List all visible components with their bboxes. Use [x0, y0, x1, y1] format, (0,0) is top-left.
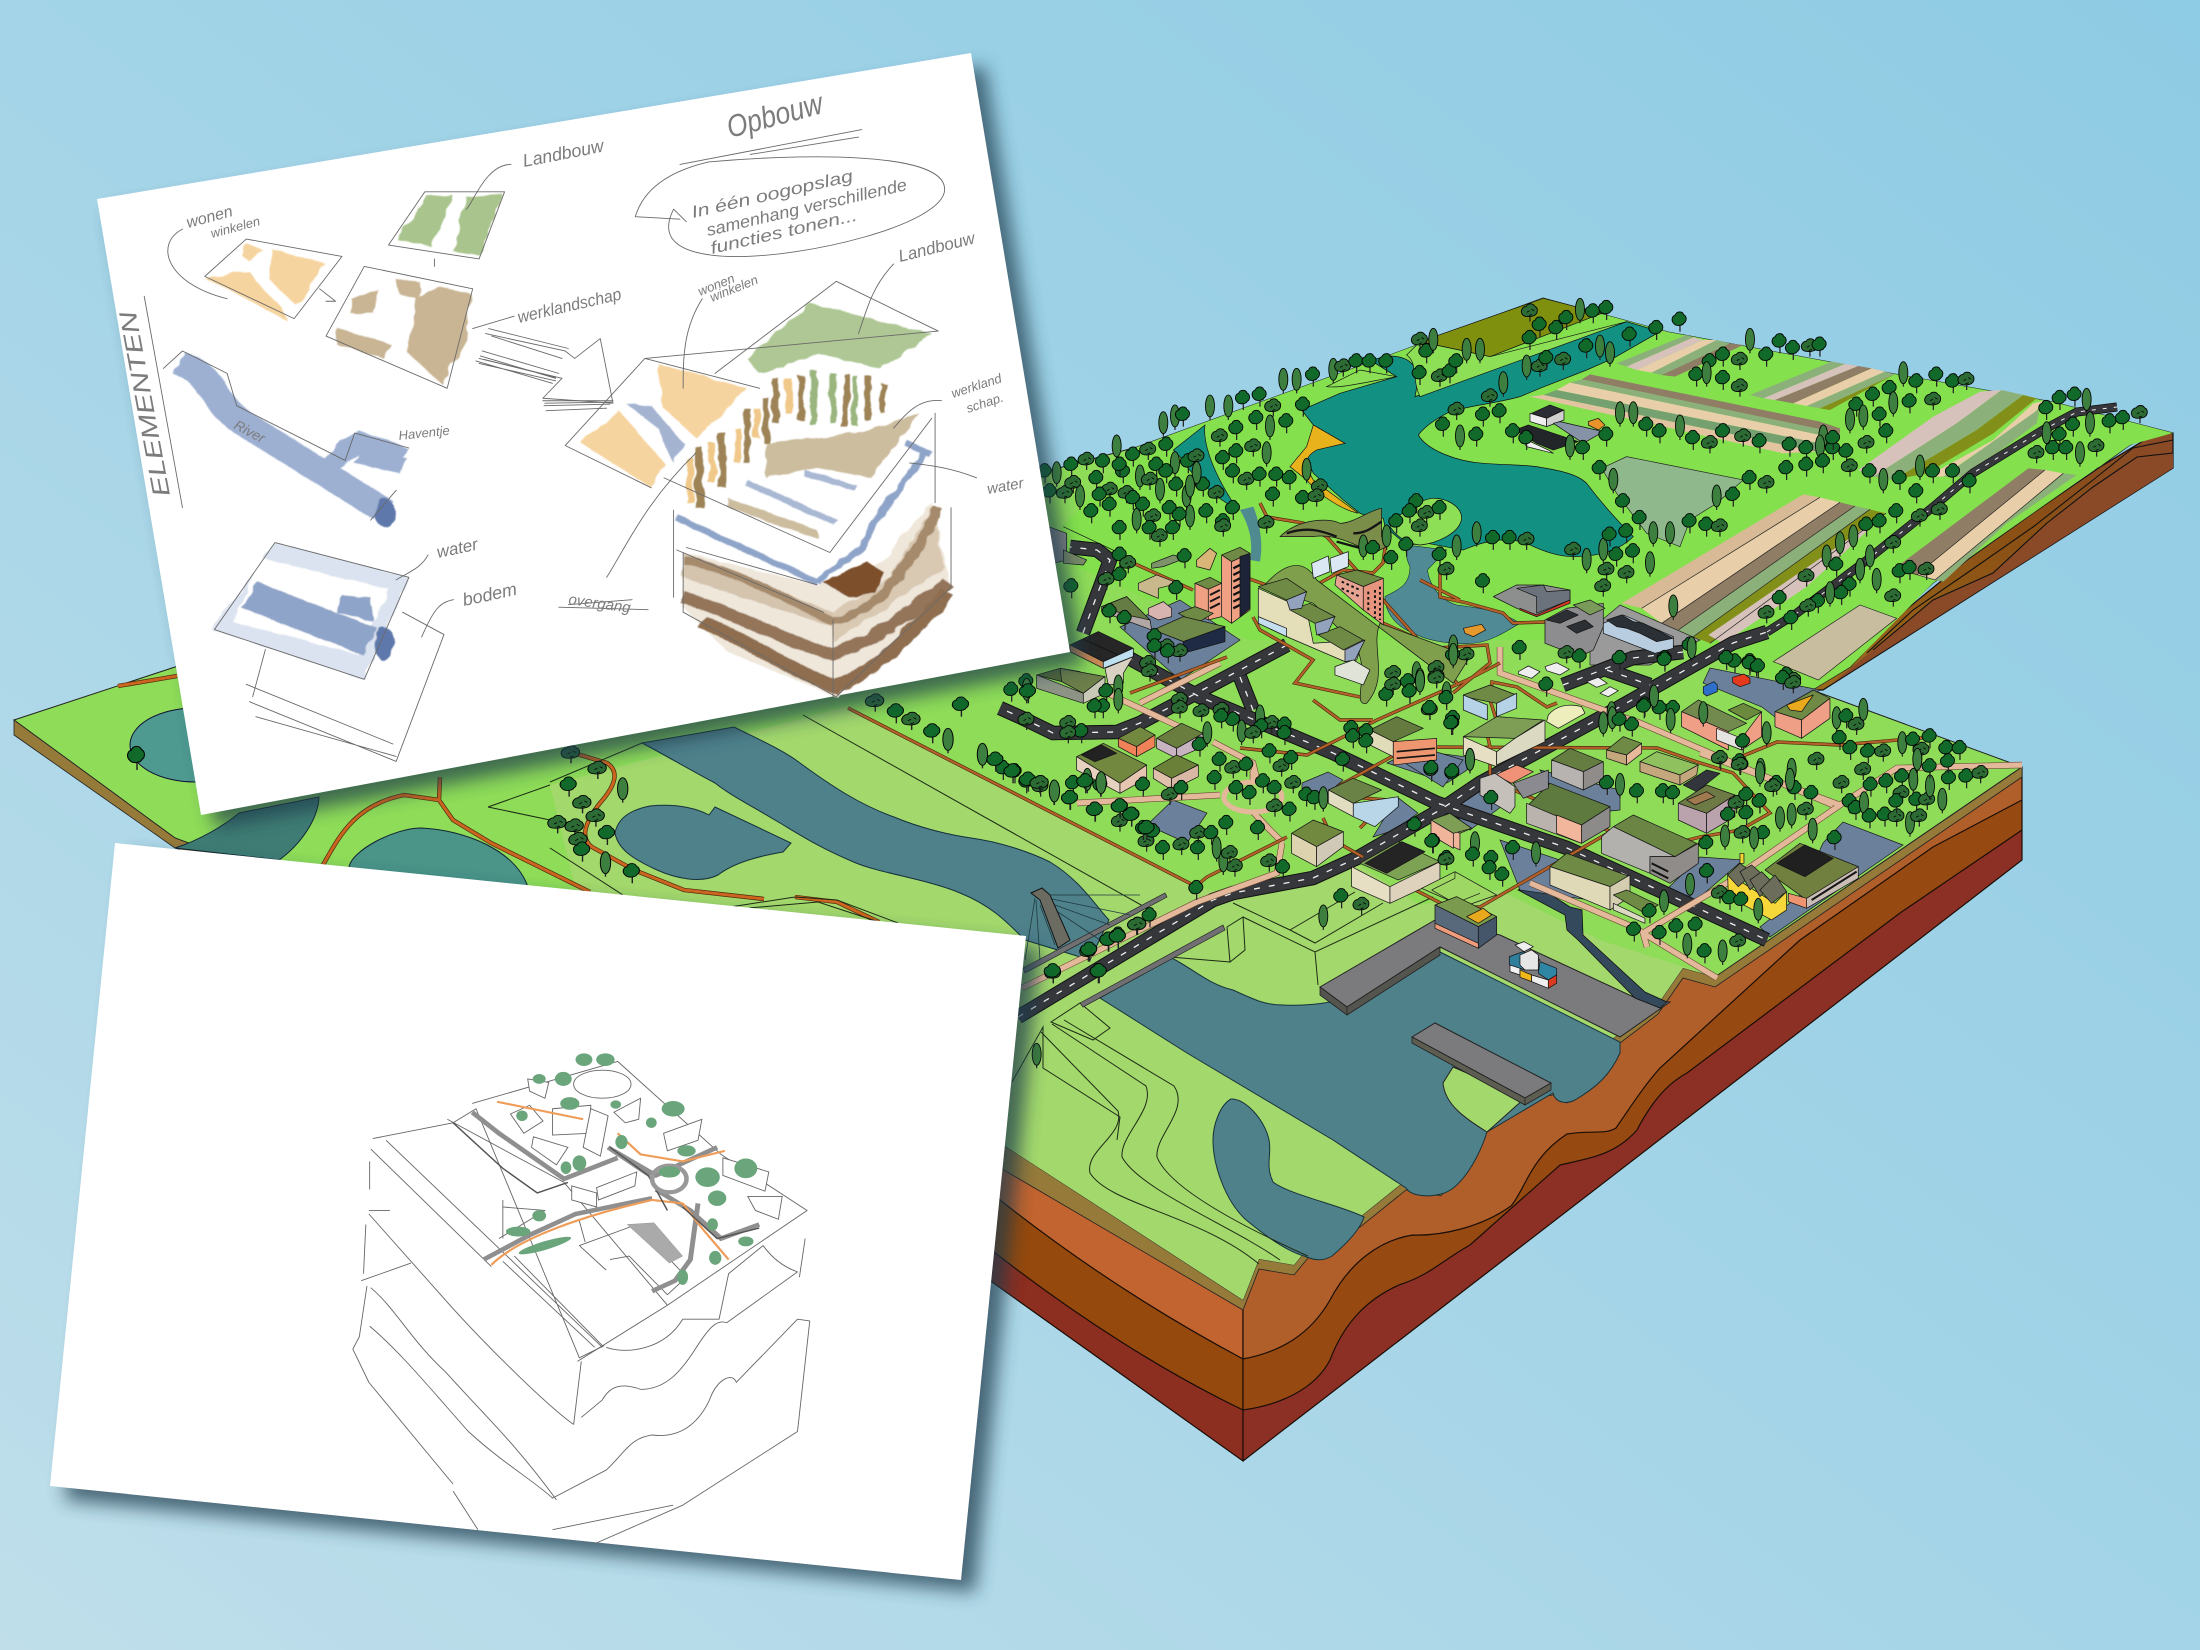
trees: west forest [1019, 354, 1474, 743]
tall pink tower [1222, 547, 1250, 562]
field: plain tan [1773, 605, 1897, 680]
hill side, upper board [1812, 433, 2173, 690]
lower sheet: white paper with pencil sketch [50, 843, 1026, 1580]
upper sheet: shadow [110, 66, 1084, 828]
cream hall [1463, 717, 1543, 738]
sketched roads [453, 1102, 759, 1291]
trees: south town [995, 639, 1496, 1068]
sketch label: ELEMENTEN: ELEMENTEN [115, 308, 176, 499]
cream stepped building [1258, 588, 1363, 662]
harbour square pit [1422, 872, 1497, 907]
sketch label: wonen winkelen small: wonen [185, 203, 235, 232]
field: centre stripes [1530, 374, 1840, 453]
tennis block [1495, 765, 1533, 783]
sketch label: water right: water [986, 475, 1026, 498]
gray factory hall [1493, 585, 1570, 615]
forest meadow boundary [1063, 527, 1193, 590]
wavy green structure [1280, 508, 1387, 553]
sketch label: Landbouw small: Landbouw [521, 135, 606, 171]
green strip above lake [1327, 322, 1627, 397]
gray green long block [1102, 597, 1152, 630]
lighter river foreland [550, 707, 1715, 1300]
green-roof office [1370, 717, 1423, 742]
solar roof building [1070, 632, 1133, 662]
pink offices [1682, 700, 1747, 732]
black barn [1515, 425, 1578, 450]
harbour island [1443, 1067, 1525, 1132]
pencil lines [144, 130, 977, 761]
farm truck [1588, 418, 1605, 430]
chimney [1740, 853, 1744, 863]
silos [1545, 603, 1603, 657]
field: right stripes [1858, 390, 2047, 480]
block outlines [353, 1061, 810, 1544]
cream block south [1292, 820, 1343, 847]
watercolour layer [179, 194, 951, 697]
quay and piers [1320, 920, 1670, 1105]
factory yard [1590, 605, 1700, 665]
white farm barn [1532, 405, 1563, 418]
buildings, north town [1037, 508, 1470, 704]
sketched trees [506, 1053, 757, 1285]
cable stay bridge pylon [1025, 888, 1140, 960]
sketch label: Landbouw large: Landbouw [896, 228, 978, 266]
tan block [1153, 755, 1198, 778]
stream [1240, 507, 1261, 562]
pink-cream row [1431, 813, 1472, 833]
sketch label: werklandschap right [949, 370, 1005, 416]
footpaths [1022, 647, 2022, 988]
lake island [1390, 498, 1462, 545]
small houses [1518, 666, 1540, 678]
wash: work landscape large [728, 413, 919, 540]
navy building [1153, 617, 1225, 642]
sketch label: overgang: overgang [567, 591, 632, 617]
offices near road [1077, 743, 1147, 783]
sketch label: River: River [232, 417, 269, 447]
olive field [1420, 298, 1602, 357]
upper farmland grass [1040, 298, 2173, 690]
trees: lake and farmland [1402, 298, 1839, 773]
field: top stripes [1750, 362, 1895, 410]
wash: soil water sheet [211, 543, 409, 679]
sketch label: water left: water [435, 534, 481, 562]
solar building south [1360, 842, 1440, 880]
dark arch [1683, 770, 1720, 792]
sketch label: Opbouw: Opbouw [723, 85, 829, 145]
wash: large housing layer [581, 363, 747, 488]
glass cubes [1312, 552, 1348, 578]
buildings, south east town [1431, 663, 1858, 988]
trees: central town [1402, 637, 1794, 965]
3D landscape model [14, 298, 2173, 1461]
brown block [1640, 752, 1698, 775]
walking trails [848, 503, 1933, 908]
wash: transition poles [696, 373, 886, 508]
harbour water [1100, 952, 1620, 1196]
sketch label: wonen winkelen small: winkelen [209, 213, 262, 241]
lower sheet: shadow [65, 855, 1040, 1592]
gray block with roof garden [1527, 783, 1610, 825]
pond by the river [615, 805, 791, 879]
wash: agriculture small [396, 194, 503, 255]
note bubble text: samenhang verschillende [705, 175, 909, 240]
canal [1518, 883, 1667, 1008]
sketch label: werklandschap: werklandschap [516, 285, 623, 327]
buildings, farm and factory [1463, 405, 1673, 657]
orange hut [1463, 624, 1486, 637]
white blue warehouse [1603, 615, 1673, 653]
solar warehouse [1765, 843, 1858, 900]
note bubble text: In één oogopslag [690, 166, 855, 222]
sketch label: wonen winkelen large: winkelen [708, 272, 760, 305]
trees: river foreland [548, 684, 1154, 983]
tan edge strips [14, 720, 2022, 1310]
green hill park [1263, 565, 1470, 704]
buildings, middle town [1077, 717, 1497, 907]
low pink block [1195, 577, 1222, 589]
sketch label: wonen winkelen small [185, 203, 262, 241]
glass house [1463, 685, 1517, 715]
soil layers: left face [985, 1148, 1243, 1461]
long gray building [1613, 815, 1697, 857]
sketch label: Haventje: Haventje [398, 423, 450, 443]
lilac block [1157, 723, 1203, 748]
container stack [1515, 942, 1533, 952]
soil layers: right face [1243, 767, 2022, 1461]
upper board: fields and lake [1622, 362, 2077, 680]
bridge gray strip [1023, 893, 1225, 1007]
foreland contour lines [1012, 892, 1433, 1264]
small glass annex [1335, 660, 1370, 685]
containers blue and red [1703, 682, 1717, 696]
terraced apartments [1138, 575, 1178, 598]
river [642, 727, 1109, 960]
pink corner block [1775, 690, 1830, 720]
farm yard [1553, 422, 1603, 443]
glass centre [1328, 778, 1382, 803]
wash: water frame [677, 443, 932, 582]
lake [1302, 322, 1660, 557]
lower bay [1385, 545, 1520, 644]
trees: east town [1699, 650, 1988, 883]
wash: soil block [683, 503, 951, 697]
pencil sketch: isometric block [353, 1053, 810, 1544]
orange block [1118, 727, 1155, 747]
wash: large agriculture layer [747, 304, 932, 373]
sketch label: werklandschap right: werkland [949, 370, 1004, 401]
field: far right stripes [1895, 468, 2077, 582]
small west water [1173, 425, 1237, 508]
upper sheet: white paper with watercolour sketches [97, 53, 1070, 815]
pale meadow [1602, 457, 1743, 547]
note bubble text [690, 166, 909, 258]
wash: river ribbon [626, 403, 683, 463]
gray cut-off block [1048, 527, 1067, 563]
roundabout [1224, 782, 1282, 812]
green apartment [1037, 668, 1080, 682]
sand beach [1290, 425, 1358, 513]
trees: eastern fields [1758, 362, 2147, 630]
left side lakes and trails [118, 676, 1150, 923]
sketched buildings [510, 1070, 782, 1219]
paved lots [1120, 600, 1903, 937]
field: lower big stripes [1622, 494, 1886, 643]
sketch label: wonen winkelen large: wonen [696, 271, 737, 299]
field: top left stripes [1617, 335, 1743, 377]
pink office east [1432, 813, 1472, 833]
grass surface [14, 298, 2173, 1300]
harbour building [1435, 897, 1497, 927]
lilac building [1678, 785, 1735, 813]
wash: work landscape small [336, 279, 471, 383]
roads [1000, 407, 2117, 1017]
cream building [1550, 853, 1630, 887]
sketch label: bodem: bodem [461, 579, 519, 610]
note bubble text: functies tonen... [709, 206, 859, 258]
wash: river [179, 363, 383, 510]
gray block east [1552, 748, 1603, 772]
yellow factory [1728, 873, 1787, 920]
sketch label: werklandschap right: schap. [964, 390, 1005, 416]
pink apartment [1337, 570, 1383, 587]
tree on left lake [128, 746, 144, 770]
small pink east [1607, 737, 1642, 755]
wash: housing small [205, 244, 326, 321]
inner bay [1213, 1099, 1364, 1260]
